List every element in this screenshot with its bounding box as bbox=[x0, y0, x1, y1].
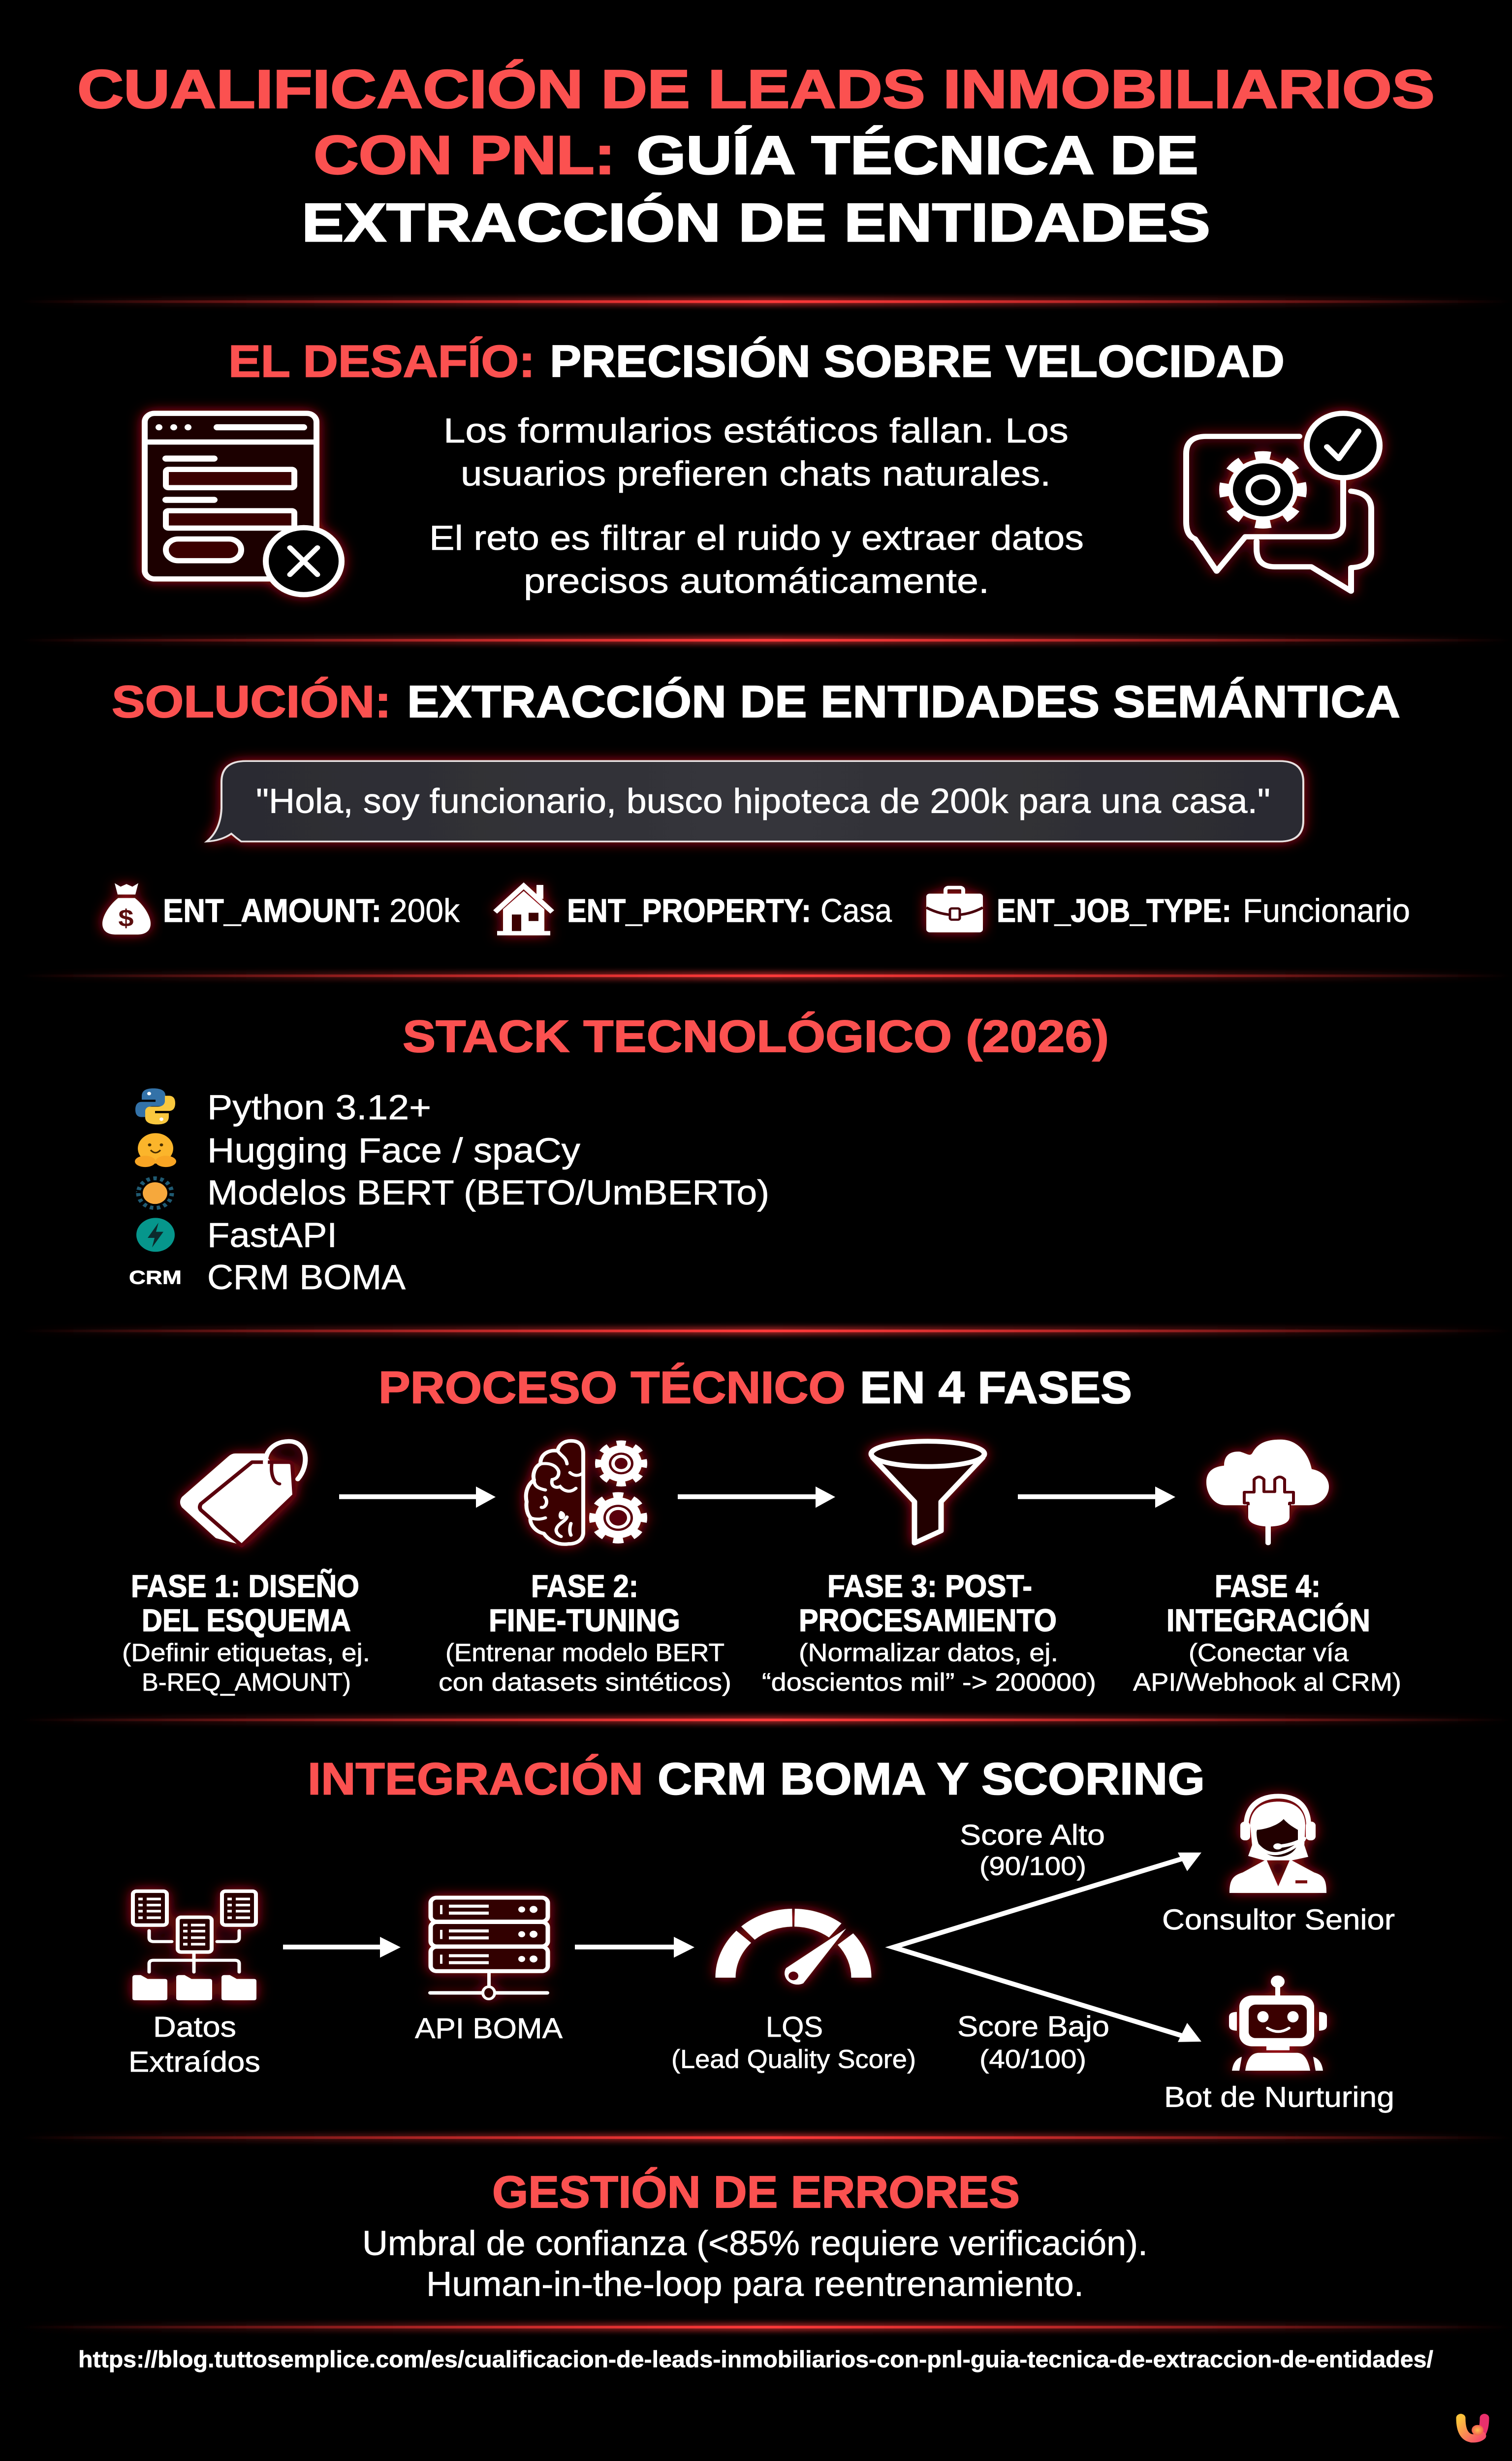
arrow: data to api bbox=[283, 1937, 401, 1957]
label: consultor senior: Consultor Senior bbox=[1162, 1904, 1395, 1936]
text: crm: CRM BOMA bbox=[207, 1258, 406, 1296]
label: datos extraídos: Extraídos bbox=[128, 2046, 260, 2078]
arrow: phase 3 to 4 bbox=[1018, 1486, 1175, 1508]
label: score bajo bbox=[957, 2011, 1109, 2074]
step: fase 2: con datasets sintéticos) bbox=[439, 1668, 731, 1696]
step: fase 3: FASE 3: POST- bbox=[827, 1569, 1032, 1604]
text: fastapi: FastAPI bbox=[207, 1216, 337, 1255]
label: score alto bbox=[960, 1819, 1105, 1881]
step: fase 2 bbox=[439, 1569, 731, 1696]
step: fase 4 bbox=[1133, 1569, 1401, 1696]
text: intro paragraph: Los formularios estáticos fallan. Los bbox=[443, 411, 1069, 450]
heading: integración: INTEGRACIÓN bbox=[308, 1753, 643, 1804]
label: lqs bbox=[671, 2012, 916, 2074]
step: fase 3 bbox=[762, 1569, 1096, 1696]
icon: chat with gear and check bbox=[1186, 413, 1380, 591]
heading: proceso: EN 4 FASES bbox=[860, 1362, 1132, 1413]
speech bubble: "Hola, soy funcionario, busco hipoteca de 200k para una casa." bbox=[256, 782, 1270, 820]
step: fase 4: (Conectar vía bbox=[1189, 1638, 1349, 1667]
step: fase 1: B-REQ_AMOUNT) bbox=[142, 1668, 351, 1696]
panel: solución bbox=[102, 676, 1410, 935]
text: intro paragraph: precisos automáticamente. bbox=[524, 562, 989, 600]
label: score bajo: Score Bajo bbox=[957, 2011, 1109, 2043]
heading: el desafío: EL DESAFÍO: bbox=[228, 336, 535, 386]
arrow: phase 1 to 2 bbox=[339, 1486, 496, 1508]
icon: gauge bbox=[725, 1918, 861, 1985]
icon: python bbox=[135, 1088, 175, 1125]
text: intro paragraph bbox=[429, 411, 1084, 600]
text: intro paragraph: El reto es filtrar el ruido y extraer datos bbox=[429, 518, 1084, 557]
entity: amount: ENT_AMOUNT: bbox=[163, 892, 381, 929]
text: error handling: Umbral de confianza (<85% requiere verificación). bbox=[362, 2224, 1148, 2262]
icon: money bag bbox=[102, 883, 151, 935]
step: fase 1: FASE 1: DISEÑO bbox=[131, 1569, 359, 1604]
title: GUÍA TÉCNICA DE bbox=[636, 125, 1198, 186]
arrow: phase 2 to 3 bbox=[678, 1486, 835, 1508]
step: fase 3: “doscientos mil” -> 200000) bbox=[762, 1668, 1096, 1696]
panel: stack tecnológico bbox=[129, 1011, 1109, 1296]
entity: amount: 200k bbox=[389, 892, 460, 929]
label: score bajo: (40/100) bbox=[979, 2045, 1086, 2074]
heading: integración bbox=[308, 1753, 1205, 1804]
heading: stack: STACK TECNOLÓGICO (2026) bbox=[403, 1011, 1109, 1062]
icon: hugging face bbox=[135, 1133, 176, 1167]
heading: gestión de errores: GESTIÓN DE ERRORES bbox=[492, 2167, 1020, 2217]
heading: el desafío: PRECISIÓN SOBRE VELOCIDAD bbox=[550, 336, 1285, 386]
icon: house bbox=[495, 885, 552, 935]
panel: gestión de errores bbox=[362, 2167, 1148, 2303]
step: fase 3: PROCESAMIENTO bbox=[799, 1604, 1057, 1638]
icon: cloud with plug bbox=[1206, 1440, 1329, 1545]
heading: proceso: PROCESO TÉCNICO bbox=[378, 1362, 846, 1413]
label: datos extraídos bbox=[128, 2012, 260, 2078]
text: intro paragraph: usuarios prefieren chats naturales. bbox=[461, 454, 1051, 493]
icon: funnel bbox=[871, 1441, 984, 1543]
text: python: Python 3.12+ bbox=[207, 1088, 431, 1127]
icon: crm: CRM bbox=[129, 1266, 182, 1288]
label: datos extraídos: Datos bbox=[153, 2012, 236, 2043]
icon: tag bbox=[182, 1441, 305, 1546]
label: score alto: (90/100) bbox=[979, 1852, 1086, 1881]
label: bot de nurturing: Bot de Nurturing bbox=[1164, 2082, 1394, 2113]
step: fase 4: API/Webhook al CRM) bbox=[1133, 1668, 1401, 1696]
step: fase 2: FASE 2: bbox=[531, 1569, 638, 1604]
panel: proceso técnico bbox=[122, 1362, 1401, 1696]
icon: bert bbox=[138, 1178, 172, 1208]
text: error handling: Human-in-the-loop para reentrenamiento. bbox=[426, 2265, 1084, 2303]
entity: job type: ENT_JOB_TYPE: bbox=[997, 892, 1231, 929]
arrow: api to gauge bbox=[575, 1937, 694, 1957]
text: bert: Modelos BERT (BETO/UmBERTo) bbox=[207, 1173, 769, 1212]
entity: property: Casa bbox=[820, 892, 892, 929]
icon: money bag: $ bbox=[118, 905, 134, 932]
step: fase 1 bbox=[122, 1569, 370, 1696]
title: CON PNL: bbox=[314, 125, 615, 186]
entity: property: ENT_PROPERTY: bbox=[567, 892, 811, 929]
label: lqs: (Lead Quality Score) bbox=[671, 2045, 916, 2074]
speech bubble bbox=[207, 761, 1303, 842]
step: fase 1: DEL ESQUEMA bbox=[142, 1604, 351, 1638]
step: fase 4: INTEGRACIÓN bbox=[1166, 1603, 1370, 1638]
label: score alto: Score Alto bbox=[960, 1819, 1105, 1851]
heading: integración: CRM BOMA Y SCORING bbox=[658, 1753, 1205, 1804]
panel: integración crm bbox=[128, 1753, 1395, 2113]
text: error handling bbox=[362, 2224, 1148, 2303]
step: fase 2: (Entrenar modelo BERT bbox=[445, 1638, 724, 1667]
entity: job type: Funcionario bbox=[1243, 892, 1410, 929]
step: fase 3: (Normalizar datos, ej. bbox=[799, 1638, 1058, 1667]
icon: broken form bbox=[145, 413, 342, 595]
title: CUALIFICACIÓN DE LEADS INMOBILIARIOS bbox=[77, 59, 1435, 119]
step: fase 1: (Definir etiquetas, ej. bbox=[122, 1638, 370, 1667]
step: fase 4: FASE 4: bbox=[1215, 1569, 1321, 1604]
panel: el desafío bbox=[145, 336, 1380, 600]
icon: brain with gears bbox=[526, 1441, 644, 1544]
icon: server bbox=[428, 1898, 549, 1999]
icon: consultant bbox=[1229, 1794, 1326, 1893]
heading: proceso bbox=[378, 1362, 1132, 1413]
text: hugging face: Hugging Face / spaCy bbox=[207, 1131, 580, 1169]
icon: briefcase bbox=[926, 887, 983, 932]
title bbox=[77, 59, 1435, 253]
heading: el desafío bbox=[228, 336, 1285, 386]
label: lqs: LQS bbox=[766, 2012, 823, 2043]
heading: solución: EXTRACCIÓN DE ENTIDADES SEMÁNTICA bbox=[407, 676, 1400, 727]
title: EXTRACCIÓN DE ENTIDADES bbox=[302, 192, 1210, 253]
arrow: score branches bbox=[893, 1853, 1201, 2042]
icon: fastapi bbox=[136, 1218, 175, 1252]
heading: solución: SOLUCIÓN: bbox=[112, 676, 391, 727]
logo bbox=[1461, 2418, 1484, 2438]
step: fase 2: FINE-TUNING bbox=[489, 1604, 680, 1638]
icon: bot bbox=[1229, 1976, 1327, 2071]
icon: extracted data bbox=[132, 1891, 256, 2000]
label: api boma: API BOMA bbox=[415, 2013, 563, 2045]
